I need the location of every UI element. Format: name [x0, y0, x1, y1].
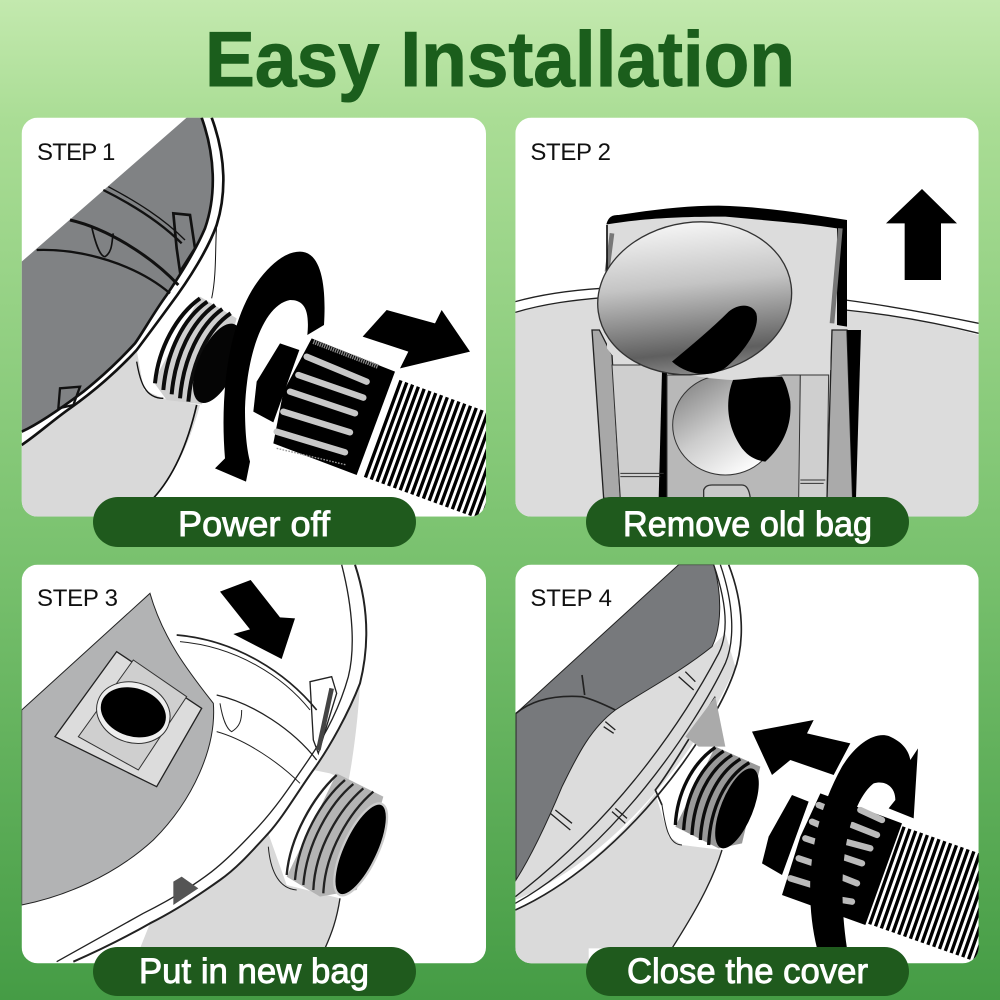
panel: step 2	[515, 118, 979, 517]
panel: step 3	[22, 565, 486, 963]
illustration: clip	[173, 877, 198, 905]
caption: close the cover: Close the cover	[627, 952, 868, 991]
caption: remove old bag: Remove old bag	[623, 505, 872, 544]
step label: STEP 3	[37, 585, 118, 612]
illustration: tub	[515, 298, 979, 517]
illustration: tub interior	[22, 118, 213, 432]
icon: rotation arrow	[215, 252, 325, 482]
illustration: threaded outlet	[153, 296, 237, 404]
illustration: rim lines	[515, 288, 979, 333]
caption: power off	[93, 497, 416, 547]
illustration: tub body	[515, 793, 722, 963]
illustration: bag collar	[515, 633, 735, 900]
icon: up arrow	[886, 189, 957, 280]
illustration: hose	[253, 338, 500, 475]
caption: close the cover	[586, 947, 909, 996]
illustration: tub body	[22, 350, 200, 517]
illustration: bag interior	[516, 565, 720, 880]
caption: put in new bag	[93, 947, 416, 996]
illustration: threaded outlet	[286, 774, 388, 896]
illustration: threaded outlet	[675, 697, 768, 854]
illustration: rim lines	[22, 118, 223, 498]
panel: step 1	[22, 118, 500, 517]
step label: STEP 4	[530, 585, 612, 612]
illustration: tub body	[140, 833, 340, 948]
title: Easy Installation	[205, 15, 795, 103]
panel: step 4	[515, 565, 999, 963]
icon: down arrow	[220, 580, 295, 659]
caption: put in new bag: Put in new bag	[139, 952, 369, 991]
illustration: rim lines	[515, 565, 741, 948]
icon: rotation arrow	[810, 735, 918, 948]
caption: power off: Power off	[178, 505, 330, 544]
step label: STEP 1	[37, 139, 115, 166]
step label: STEP 2	[530, 139, 611, 166]
icon: pull direction arrow	[363, 310, 470, 368]
illustration: rim lines	[57, 565, 366, 962]
caption: remove old bag	[586, 497, 909, 547]
icon: push direction arrow	[752, 720, 850, 775]
illustration: bag collar top	[588, 206, 847, 387]
illustration: hose	[762, 793, 999, 925]
illustration: bag	[22, 593, 214, 905]
illustration: lower bag panels	[592, 330, 861, 498]
